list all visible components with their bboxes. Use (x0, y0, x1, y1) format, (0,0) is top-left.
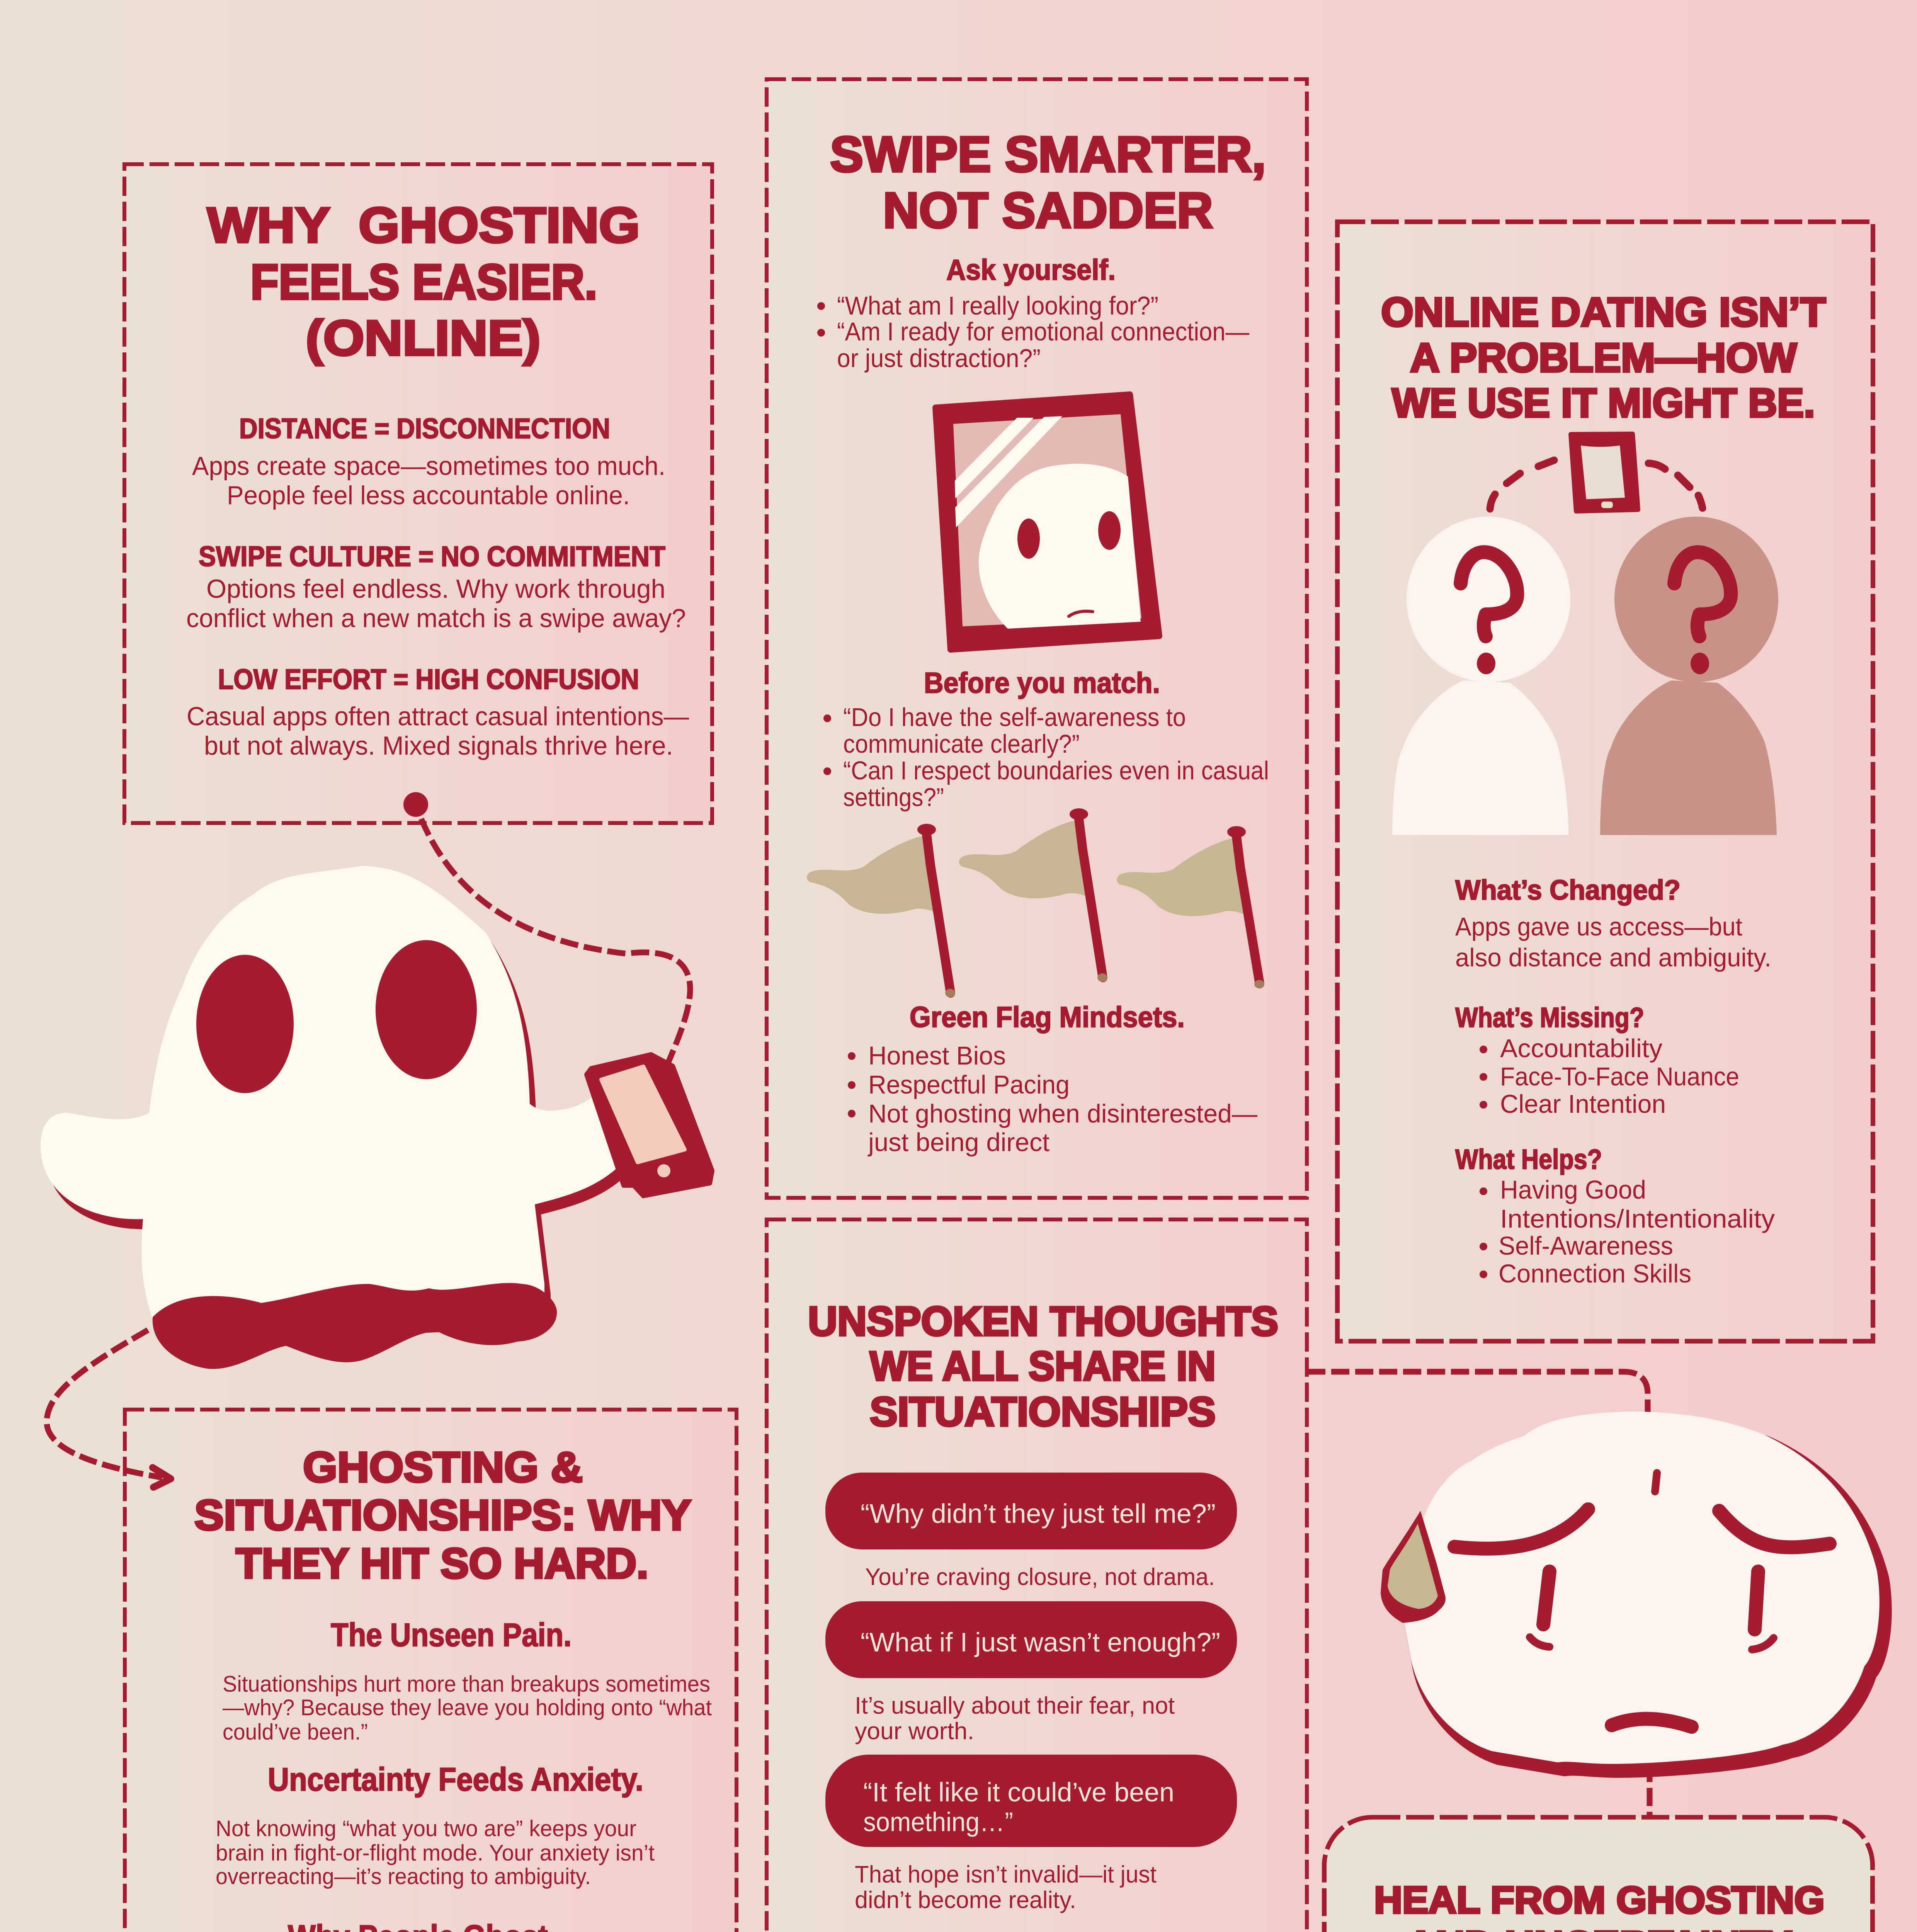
text block: unseen pain: —why? Because they leave you holding onto “what (223, 1695, 712, 1720)
text block: low effort (187, 664, 689, 760)
text block: uncertainty feeds anxiety: brain in fight-or-flight mode. Your anxiety isn’t (216, 1840, 655, 1866)
text: craving closure: You’re craving closure, not drama. (865, 1564, 1215, 1590)
text block: distance: Apps create space—sometimes too much. (192, 451, 665, 481)
person: left (1392, 517, 1570, 835)
text: their fear: It’s usually about their fear, not (855, 1692, 1175, 1719)
text block: what helps: Intentions/Intentionality (1500, 1204, 1775, 1233)
heading: why ghosting feels easier: WHY GHOSTING (207, 197, 640, 253)
text block: green flag mindsets: Respectful Pacing (868, 1070, 1070, 1099)
text block: ask yourself: Ask yourself. (946, 253, 1116, 286)
text block: before you match (823, 667, 1269, 812)
text block: what's missing (1455, 1002, 1739, 1119)
text block: green flag mindsets: Green Flag Mindsets. (910, 1001, 1185, 1033)
text block: uncertainty feeds anxiety (216, 1761, 655, 1889)
heading: online dating: WE USE IT MIGHT BE. (1392, 380, 1815, 426)
text block: ask yourself: “What am I really looking for?” (837, 291, 1158, 320)
text block: what's changed (1455, 875, 1771, 972)
heading: unspoken thoughts: WE ALL SHARE IN (870, 1343, 1216, 1389)
text block: low effort: but not always. Mixed signals thrive here. (204, 731, 673, 760)
heading: online dating: ONLINE DATING ISN’T (1381, 289, 1826, 335)
text block: green flag mindsets: Not ghosting when disinterested— (868, 1099, 1257, 1128)
text: hope isn't invalid (855, 1861, 1157, 1913)
text: hope isn't invalid: didn’t become reality. (855, 1887, 1076, 1913)
icon: three green flags (807, 808, 1264, 997)
heading: swipe smarter: SWIPE SMARTER, (830, 126, 1266, 182)
text block: distance (192, 413, 665, 510)
heading: ghosting and situationships (194, 1444, 691, 1587)
text block: what's missing: Face-To-Face Nuance (1500, 1062, 1739, 1091)
illustration: sad sweating face (1381, 1412, 1886, 1772)
text block: green flag mindsets (848, 1001, 1257, 1157)
text block: green flag mindsets: just being direct (867, 1128, 1050, 1157)
heading: why ghosting feels easier: FEELS EASIER. (250, 254, 597, 310)
panel: swipe smarter (767, 79, 1307, 1198)
icon: sweat drop (1381, 1511, 1446, 1623)
arrow: ghost to ghosting panel (47, 1330, 171, 1487)
panel: unspoken thoughts (767, 1219, 1307, 1932)
text block: what's changed: What’s Changed? (1455, 875, 1681, 906)
text block: what helps: Having Good (1500, 1175, 1646, 1204)
callout: what if I just wasn't enough (825, 1601, 1237, 1678)
heading: unspoken thoughts: UNSPOKEN THOUGHTS (808, 1298, 1278, 1344)
arrow: unspoken thoughts to sad face to heal panel (1307, 1372, 1650, 1817)
arrow: panel one to phone (403, 792, 690, 1064)
icon: phone between two people (1392, 434, 1778, 835)
heading: online dating (1381, 289, 1826, 426)
text block: uncertainty feeds anxiety: Not knowing “what you two are” keeps your (216, 1816, 636, 1841)
text block: low effort: LOW EFFORT = HIGH CONFUSION (218, 664, 639, 695)
text block: what's missing: What’s Missing? (1455, 1002, 1644, 1033)
callout: could've been something (825, 1755, 1237, 1847)
text block: unseen pain: The Unseen Pain. (331, 1617, 572, 1653)
heading: ghosting and situationships: SITUATIONSHIPS: WHY (194, 1492, 691, 1539)
text block: unseen pain: Situationships hurt more than breakups sometimes (223, 1672, 710, 1697)
panel: why ghosting feels easier (124, 164, 712, 823)
text block: uncertainty feeds anxiety: Uncertainty Feeds Anxiety. (268, 1761, 643, 1798)
heading: why ghosting feels easier (207, 197, 640, 366)
text block: low effort: Casual apps often attract casual intentions— (187, 702, 689, 731)
text block: ask yourself (817, 253, 1249, 373)
person: right (1600, 517, 1778, 835)
text block: before you match: communicate clearly?” (843, 730, 1080, 759)
text block: swipe culture: Options feel endless. Why work through (206, 574, 665, 604)
text block: ask yourself: “Am I ready for emotional connection— (837, 317, 1249, 346)
heading: why ghosting feels easier: (ONLINE) (306, 310, 541, 366)
callout: could've been something: something…” (863, 1807, 1013, 1837)
callout: why didn't they just tell me (825, 1473, 1237, 1549)
panel: online dating (1337, 222, 1873, 1341)
text block: what's missing: Clear Intention (1500, 1090, 1666, 1119)
text block: swipe culture: conflict when a new match is a swipe away? (186, 604, 686, 633)
text block: distance: DISTANCE = DISCONNECTION (239, 413, 610, 444)
text block: before you match: Before you match. (924, 667, 1160, 699)
text block: what helps: Connection Skills (1499, 1259, 1691, 1288)
icon: tablet with sad face (936, 395, 1159, 650)
text block: what helps: What Helps? (1455, 1144, 1602, 1175)
heading: online dating: A PROBLEM—HOW (1410, 335, 1797, 381)
text block: ask yourself: or just distraction?” (837, 344, 1041, 373)
text block: what's missing: Accountability (1500, 1034, 1663, 1063)
callout: what if I just wasn't enough: “What if I just wasn’t enough?” (861, 1627, 1220, 1657)
text block: what helps: Self-Awareness (1499, 1231, 1673, 1260)
text block: what's changed: also distance and ambiguity. (1455, 943, 1771, 972)
text block: unseen pain (223, 1617, 712, 1745)
heading: heal from ghosting: HEAL FROM GHOSTING (1374, 1879, 1825, 1921)
text block: what helps (1455, 1144, 1775, 1288)
text block: before you match: settings?” (843, 783, 944, 812)
panel: heal from ghosting (1324, 1817, 1873, 1932)
text block: what's changed: Apps gave us access—but (1455, 912, 1742, 941)
heading: unspoken thoughts (808, 1298, 1278, 1435)
text block: distance: People feel less accountable online. (227, 481, 630, 510)
text block: green flag mindsets: Honest Bios (868, 1041, 1006, 1070)
text: their fear (855, 1692, 1175, 1745)
heading: ghosting and situationships: THEY HIT SO HARD. (236, 1540, 648, 1587)
icon: phone in ghost hand (587, 1054, 712, 1196)
heading: swipe smarter (830, 126, 1266, 238)
heading: unspoken thoughts: SITUATIONSHIPS (870, 1388, 1216, 1435)
text block: swipe culture: SWIPE CULTURE = NO COMMITMENT (199, 541, 665, 572)
panel: ghosting and situationships (125, 1410, 737, 1932)
text block: before you match: “Can I respect boundaries even in casual (843, 756, 1269, 785)
heading: swipe smarter: NOT SADDER (883, 182, 1213, 238)
text block: uncertainty feeds anxiety: overreacting—it’s reacting to ambiguity. (216, 1864, 591, 1889)
text block: before you match: “Do I have the self-awareness to (843, 703, 1186, 732)
callout: could've been something: “It felt like it could’ve been (863, 1777, 1174, 1807)
text block: unseen pain: could’ve been.” (223, 1719, 368, 1745)
heading: ghosting and situationships: GHOSTING & (303, 1444, 583, 1491)
text: their fear: your worth. (855, 1718, 974, 1745)
text block: swipe culture (186, 541, 686, 633)
illustration: ghost holding phone (41, 866, 712, 1369)
callout: why didn't they just tell me: “Why didn’t they just tell me?” (861, 1498, 1216, 1529)
text: hope isn't invalid: That hope isn’t invalid—it just (855, 1861, 1157, 1888)
